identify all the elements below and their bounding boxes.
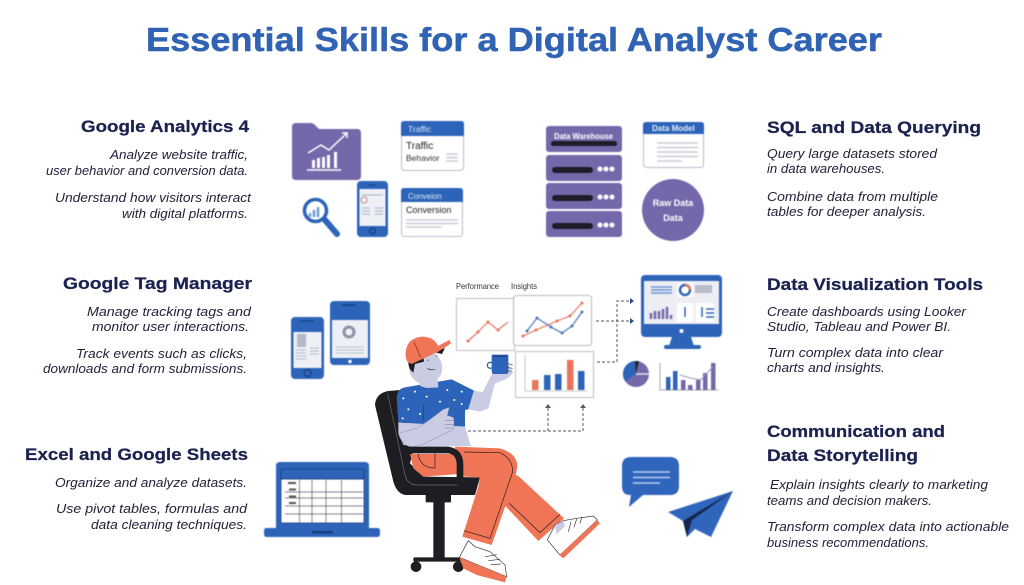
text block: Excel description: [55, 475, 248, 532]
raised arm and hand: [468, 362, 513, 412]
heading: Communication and Data Storytelling: [767, 422, 945, 465]
icon: phone: [357, 181, 388, 237]
text block: SQL description: Query large datasets stored: [767, 146, 938, 161]
icon: data warehouse server stack: [546, 126, 622, 237]
icon: Raw Data circle: Raw Data: [653, 198, 694, 208]
torso: [397, 379, 474, 447]
chart: Insights line chart: [514, 296, 592, 346]
chair: [375, 390, 480, 572]
heading: Google Tag Manager: Google Tag Manager: [63, 274, 252, 293]
trousers: back leg: [500, 473, 564, 541]
text block: GA4 description: [46, 147, 252, 221]
shoe: back foot: [547, 516, 600, 558]
panel: Google Tag Manager text: [43, 274, 252, 376]
icon: speech bubble: [622, 457, 679, 507]
icon: Raw Data circle: [642, 179, 704, 241]
text block: GTM description: monitor user interactions.: [92, 319, 249, 334]
trousers: front leg: [418, 447, 517, 545]
heading: Communication and Data Storytelling: Communication and: [767, 422, 945, 441]
text block: GA4 description: with digital platforms.: [122, 206, 248, 221]
icon: two phones: [291, 301, 370, 379]
shoe: front foot: [459, 541, 507, 582]
text block: GA4 description: Analyze website traffic,: [109, 147, 248, 162]
icon: paper airplane: [668, 491, 733, 537]
text block: visualization description: Turn complex data into clear: [767, 345, 944, 360]
card: Data Model: [643, 122, 704, 168]
icon: laptop with spreadsheet: [264, 462, 380, 537]
text block: visualization description: charts and insights.: [767, 360, 885, 375]
chart labels: Performance and Insights: Insights: [511, 281, 537, 291]
arrows: dashed connectors to monitor: [596, 298, 634, 362]
text block: GTM description: downloads and form submissions.: [43, 361, 247, 376]
chart: purple and blue combo chart: [660, 363, 718, 390]
panel: Google Analytics 4 text: [46, 117, 252, 221]
text block: communication description: teams and decision makers.: [767, 493, 932, 508]
text block: visualization description: Studio, Tableau and Power BI.: [767, 319, 951, 334]
illustration: analyst sitting in chair holding a mug: [375, 337, 600, 582]
title: Essential Skills for a Digital Analyst Career: [146, 21, 882, 58]
icon: Raw Data circle: Data: [663, 213, 684, 223]
heading: Data Visualization Tools: Data Visualization Tools: [767, 275, 983, 294]
text block: SQL description: in data warehouses.: [767, 161, 885, 176]
text block: Excel description: Use pivot tables, formulas and: [56, 501, 248, 516]
text block: communication description: business recommendations.: [767, 535, 929, 550]
icon: data warehouse server stack: Data Warehouse: [554, 132, 614, 141]
text block: SQL description: Combine data from multiple: [767, 189, 938, 204]
card: Conversion: [401, 188, 463, 236]
icon: dashboard monitor: [641, 275, 722, 349]
card: Traffic: [401, 121, 464, 170]
chart: Performance line chart: [456, 298, 514, 350]
trousers: thigh inside armrest: [410, 454, 459, 477]
card: Traffic: Behavior: [406, 153, 440, 163]
text block: GTM description: Track events such as clicks,: [76, 346, 247, 361]
panel: Communication and Data Storytelling text: [767, 422, 1009, 550]
chart labels: Performance and Insights: Performance: [456, 281, 499, 291]
forearm and thumbs up hand: [398, 405, 454, 447]
card: Conversion: Conveion: [408, 192, 442, 201]
head: [406, 337, 451, 388]
text block: communication description: Explain insights clearly to marketing: [770, 477, 989, 492]
card: Conversion: Conversion: [406, 205, 452, 215]
heading: Excel and Google Sheets: Excel and Google Sheets: [25, 445, 248, 464]
text block: Excel description: Organize and analyze datasets.: [55, 475, 247, 490]
icon: analytics folder: [292, 123, 361, 180]
text block: GA4 description: Understand how visitors interact: [55, 190, 252, 205]
text block: visualization description: [767, 304, 967, 375]
heading: Google Analytics 4: Google Analytics 4: [81, 117, 250, 136]
text block: Excel description: data cleaning techniques.: [91, 517, 247, 532]
text block: GTM description: [43, 304, 252, 376]
text block: SQL description: tables for deeper analysis.: [767, 204, 926, 219]
text block: GA4 description: user behavior and conversion data.: [46, 163, 248, 178]
panel: Excel and Google Sheets text: [25, 445, 248, 532]
mug: [487, 355, 513, 374]
chart: pie chart: [623, 361, 649, 387]
text block: communication description: Transform complex data into actionable: [767, 519, 1009, 534]
text block: communication description: [767, 477, 1009, 550]
text block: SQL description: [767, 146, 938, 219]
chart labels: Performance and Insights: [456, 281, 537, 291]
panel: Data Visualization Tools text: [767, 275, 983, 375]
heading: SQL and Data Querying: SQL and Data Querying: [767, 118, 981, 137]
heading: Communication and Data Storytelling: Data Storytelling: [767, 446, 918, 465]
armrest: [402, 450, 460, 485]
chart: bar chart with coloured bars: [516, 352, 594, 398]
card: Traffic: Traffic: [408, 124, 432, 134]
card: Data Model: Data Model: [652, 124, 695, 133]
text block: visualization description: Create dashboards using Looker: [767, 304, 967, 319]
card: Traffic: Traffic: [406, 141, 433, 152]
panel: SQL and Data Querying text: [767, 118, 981, 219]
icon: magnifying glass: [304, 200, 337, 234]
arrows: dashed connectors to bar chart: [468, 404, 586, 431]
text block: GTM description: Manage tracking tags and: [87, 304, 252, 319]
